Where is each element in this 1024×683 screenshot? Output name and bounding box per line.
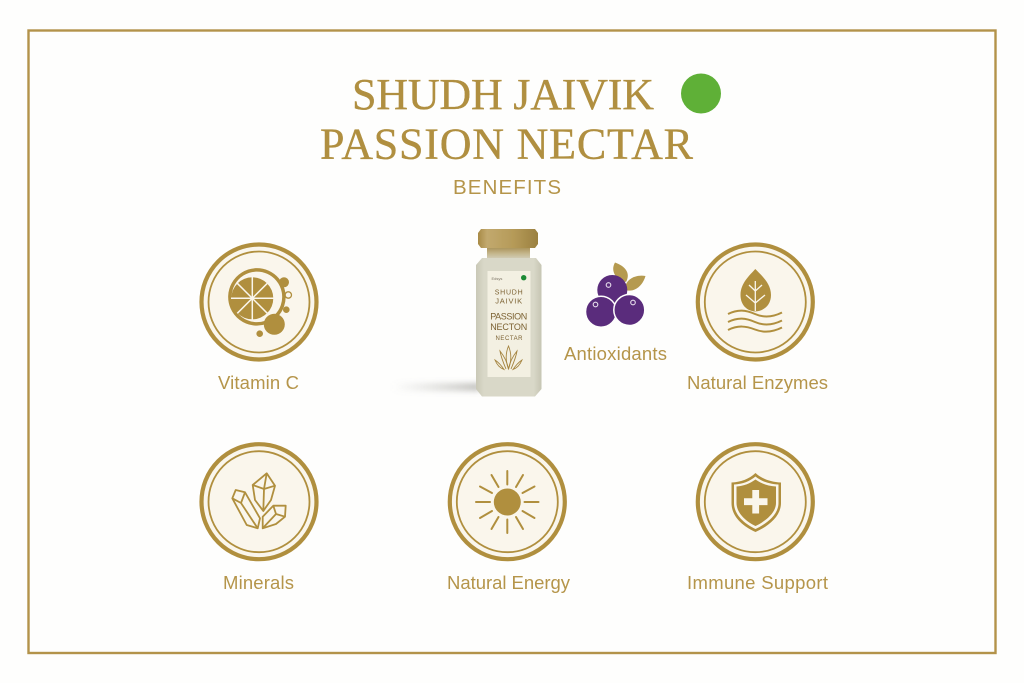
title: PASSION NECTAR bbox=[320, 120, 694, 168]
label: immune support: Immune Support bbox=[687, 572, 828, 593]
panel: minerals bbox=[202, 444, 316, 593]
badge: vitamin c bbox=[202, 244, 316, 360]
badge: minerals bbox=[202, 444, 316, 559]
label aloe plant bbox=[495, 346, 522, 370]
panel: natural energy bbox=[447, 444, 571, 593]
label text: NECTAR bbox=[496, 336, 523, 342]
title: SHUDH JAIVIK bbox=[352, 70, 654, 119]
label: natural enzymes: Natural Enzymes bbox=[687, 372, 828, 393]
label: minerals: Minerals bbox=[223, 572, 294, 593]
label text: SHUDH bbox=[495, 290, 523, 297]
bottle body bbox=[476, 258, 542, 396]
label text: JAIVIK bbox=[495, 297, 522, 306]
label text: PASSION bbox=[490, 311, 527, 321]
label brand: Edsys bbox=[492, 276, 502, 281]
label: vitamin c: Vitamin C bbox=[218, 372, 299, 393]
panel: immune support bbox=[687, 444, 828, 593]
label green dot bbox=[521, 275, 526, 280]
icon: green dot bbox=[681, 74, 721, 114]
bottle shadow bbox=[392, 383, 480, 391]
label text bbox=[490, 290, 527, 342]
icon: crystals bbox=[232, 473, 286, 528]
bottle neck bbox=[487, 247, 530, 260]
icon: sun bbox=[476, 471, 538, 533]
label: antioxidants: Antioxidants bbox=[564, 343, 667, 364]
product bottle bbox=[476, 229, 542, 396]
icon: berries bbox=[586, 262, 646, 327]
icon: leaf and waves bbox=[728, 269, 782, 332]
label: natural energy: Natural Energy bbox=[447, 572, 571, 593]
title bbox=[320, 70, 694, 168]
badge: natural energy bbox=[450, 444, 565, 559]
label text: NECTON bbox=[490, 322, 527, 332]
panel: natural enzymes bbox=[687, 244, 828, 393]
panel: vitamin c bbox=[202, 244, 316, 393]
badge: natural enzymes bbox=[698, 244, 813, 360]
badge: immune support bbox=[698, 444, 813, 559]
leaves bbox=[613, 262, 646, 291]
panel: antioxidants bbox=[564, 262, 667, 364]
subtitle: BENEFITS bbox=[453, 176, 561, 199]
bottle label bbox=[488, 271, 530, 377]
icon: orange slice with bubbles bbox=[230, 270, 291, 337]
icon: shield with cross bbox=[732, 473, 781, 532]
bottle cap bbox=[478, 229, 538, 248]
